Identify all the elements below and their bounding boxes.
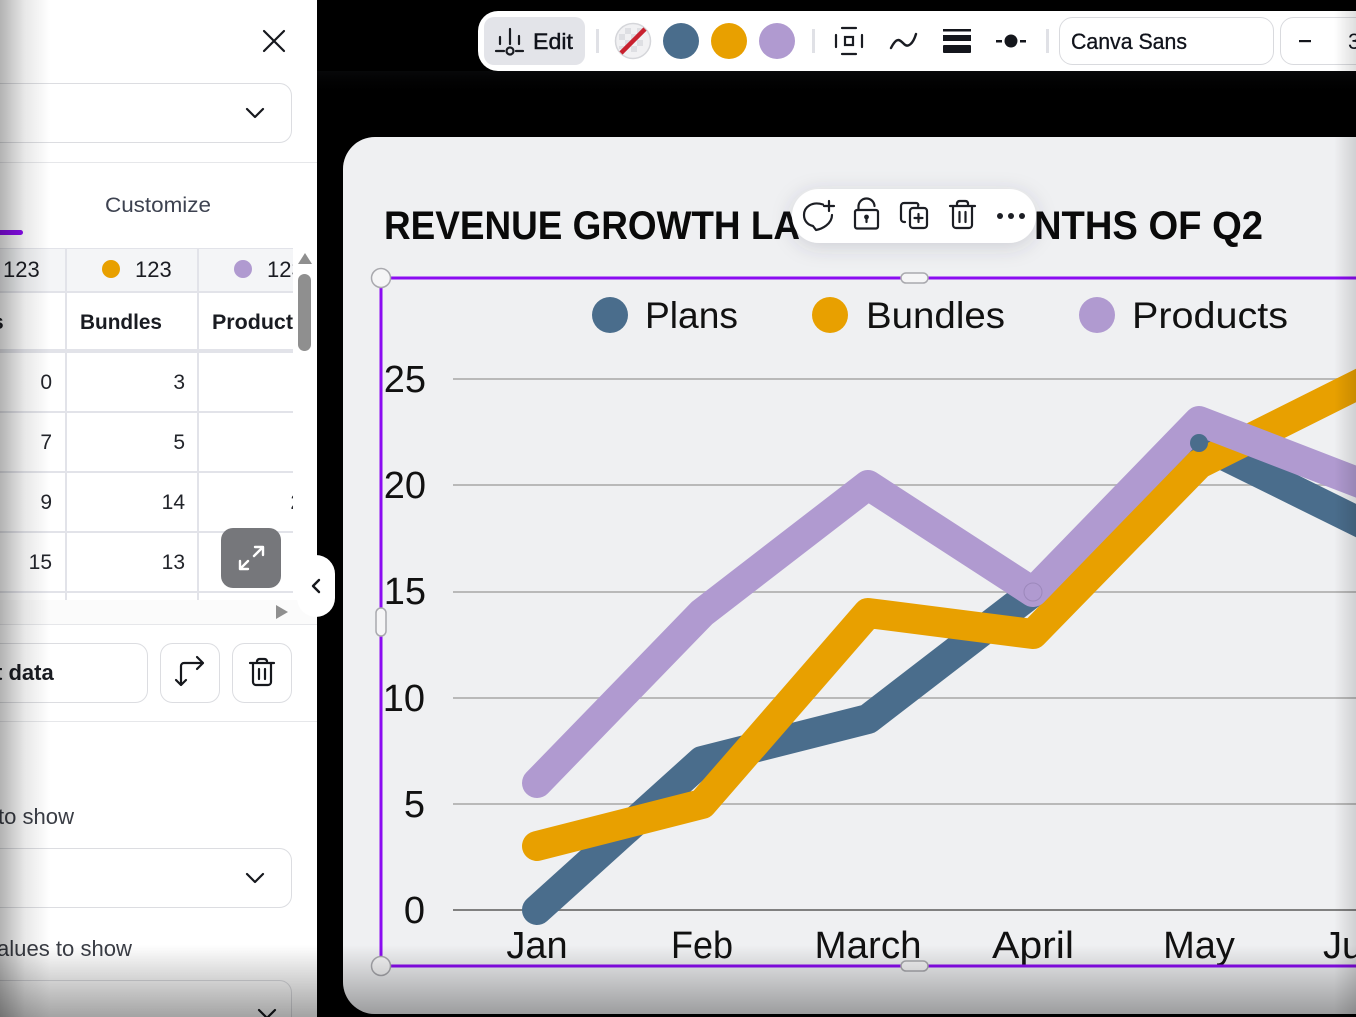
toolbar dividers [596,29,1049,53]
column type headers [4,260,293,278]
table values: 7 [40,431,52,454]
collapse sidebar tab [297,555,335,617]
gridlines and y axis: 5 [404,784,425,826]
icon: trash [950,201,975,228]
chart title [384,204,1263,248]
series: Plans [537,443,1356,910]
chart legend [592,294,1288,336]
column type headers: 123 [3,257,40,282]
gridlines and y axis: 25 [384,359,426,401]
gridlines and y axis: 0 [404,890,425,932]
icon: unlock [855,198,878,228]
x axis labels: Feb [671,925,733,967]
chart type dropdown [0,84,292,142]
font size control [1280,18,1356,64]
chart title: REVENUE GROWTH LA [384,204,800,248]
x axis labels: April [992,925,1074,967]
import data button [0,644,148,702]
font selector: Canva Sans [1071,29,1187,54]
swap axes button [160,644,220,702]
x axis labels [506,925,1356,967]
gridlines and y axis: 15 [384,571,426,613]
series names: Product [212,311,293,334]
series names: Bundles [80,311,162,334]
table values: 5 [173,431,185,454]
vertical scrollbar [298,253,312,351]
gridlines and y axis: 10 [383,678,425,720]
series: Products [537,421,1356,783]
gridlines and y axis [383,359,1356,932]
x axis labels: March [814,925,922,967]
table values: 15 [29,551,52,574]
table values: 2 [290,491,302,514]
table values [29,371,302,574]
gridlines and y axis: 20 [384,465,426,507]
edit button: Edit [533,29,573,54]
icon: line style [891,34,916,48]
data point markers [1024,434,1208,601]
icon: line weight [943,29,971,53]
x axis labels: May [1163,925,1235,967]
series names [0,314,293,329]
tab: customize: Customize [105,194,211,217]
icon: more [997,213,1025,219]
icon: marker style [996,34,1026,48]
icon: close [264,31,284,51]
edit button [484,17,585,65]
column type headers: 123 [267,257,304,282]
icon: spacing [836,28,862,54]
series: Bundles [537,381,1356,846]
active tab indicator [0,230,23,235]
chart legend: Products [1132,294,1288,336]
selection frame [372,268,1356,976]
icon: add comment [804,201,834,230]
x axis labels: Jan [506,925,568,967]
expand table button [221,528,281,588]
table values: 14 [162,491,185,514]
chart title: NTHS OF Q2 [1034,204,1263,248]
table values: 9 [40,491,52,514]
label: categories to show: to show [0,804,74,829]
top toolbar [317,11,1356,95]
panel: chart data sidebar [0,0,317,1017]
horizontal scrollbar [0,600,317,625]
categories dropdown [0,848,292,908]
floating action bar [792,189,1036,243]
table values: 3 [173,371,185,394]
data table [0,247,304,600]
label: values to show: alues to show [0,936,132,961]
line series [537,381,1356,910]
icon: duplicate [901,203,927,228]
chart legend: Bundles [866,294,1005,336]
font selector [1060,18,1274,64]
delete button [232,644,292,702]
table values: 13 [162,551,185,574]
values dropdown [0,980,292,1017]
panel: chart card [343,137,1356,1014]
table values: 0 [40,371,52,394]
column type headers: 123 [135,257,172,282]
chart legend: Plans [645,294,738,336]
color swatches [616,23,795,59]
